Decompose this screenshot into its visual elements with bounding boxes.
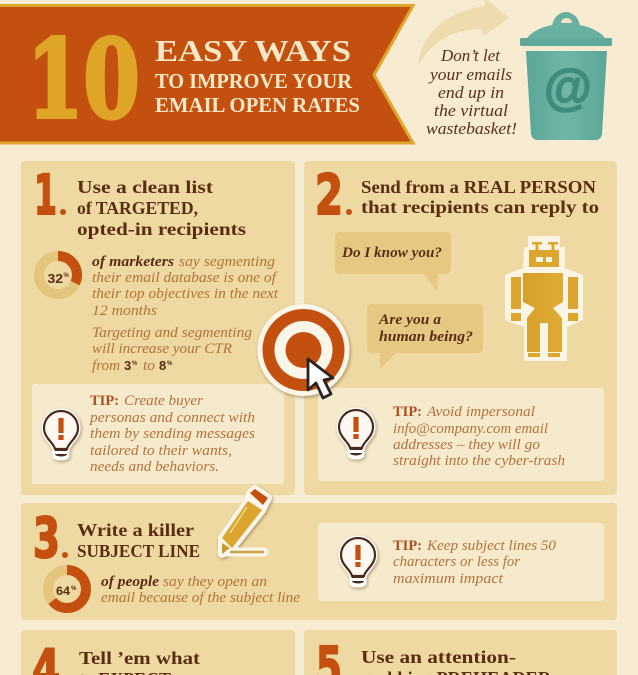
wastebasket caption: wastebasket! — [426, 119, 517, 138]
speech bubble: are you human — [367, 304, 483, 369]
tip text: straight into the cyber-trash — [393, 453, 565, 469]
speech bubble: do I know you: Do I know you? — [341, 245, 442, 261]
tip text: them by sending messages — [90, 426, 255, 442]
tip text: personas and connect with — [89, 410, 255, 426]
wastebasket caption: your emails — [428, 65, 512, 84]
title text: EASY WAYS — [155, 33, 351, 68]
heading 3 — [77, 520, 200, 561]
statistic text: % — [132, 361, 138, 367]
tip text: TIP: — [393, 538, 422, 554]
statistic text: 3 — [124, 358, 131, 373]
heading 5: Use an attention- — [361, 647, 516, 667]
heading 1: of TARGETED, — [77, 198, 198, 218]
title text: TO IMPROVE YOUR — [155, 69, 353, 93]
heading 2: that recipients can reply to — [361, 197, 599, 217]
heading 4 — [79, 648, 200, 675]
statistic text: their email database is one of — [92, 270, 278, 286]
heading 1 — [77, 177, 246, 239]
wastebasket caption — [426, 46, 517, 138]
donut chart: 64% — [48, 570, 86, 608]
tip text: TIP: — [90, 393, 119, 409]
icon: robot — [505, 236, 583, 361]
tip box 1 — [32, 384, 284, 484]
statistic text: will increase your CTR — [92, 341, 232, 357]
heading 4: Tell ’em what — [79, 648, 200, 668]
heading 3: Write a killer — [77, 520, 194, 540]
statistic text — [92, 254, 279, 374]
statistic text: from — [92, 358, 120, 374]
tip box 2 — [318, 388, 604, 481]
statistic text: 12 months — [92, 303, 157, 319]
tip text — [393, 538, 557, 587]
panel 3: subject line — [21, 489, 617, 620]
statistic text: of people — [101, 574, 159, 590]
panel 2: real person — [304, 161, 617, 495]
icon: cursor — [308, 359, 333, 398]
tip box 3 — [318, 523, 604, 601]
donut chart: 32%: % — [64, 273, 70, 279]
tip text: maximum impact — [393, 571, 504, 587]
icon: light bulb — [338, 409, 374, 458]
title banner — [0, 6, 413, 143]
wastebasket caption: Don’t let — [440, 46, 501, 65]
panel 1: clean list — [21, 161, 295, 495]
heading 3: SUBJECT LINE — [77, 541, 200, 561]
tip text: Create buyer — [124, 393, 203, 409]
donut chart: 32% — [39, 256, 77, 294]
tip text: needs and behaviors. — [90, 459, 219, 475]
tip text: Avoid impersonal — [426, 404, 535, 420]
tip text: info@company.com email — [393, 421, 548, 437]
icon: trash can — [520, 12, 612, 140]
number 3: 3 — [33, 506, 60, 570]
statistic text — [101, 574, 300, 606]
statistic text: their top objectives in the next — [92, 286, 279, 302]
heading 2 — [361, 177, 599, 217]
heading 1: opted-in recipients — [77, 219, 246, 239]
statistic text: % — [167, 361, 173, 367]
statistic text: 8 — [159, 358, 166, 373]
tip text: Keep subject lines 50 — [426, 538, 557, 554]
big number 10: 10 — [27, 15, 140, 143]
statistic text: to — [143, 358, 156, 374]
panel 4: tell them what to expect — [21, 630, 295, 675]
icon: pencil — [222, 489, 268, 554]
donut chart: 32%: 32 — [48, 272, 63, 286]
icon: trash can: @ — [544, 60, 592, 115]
tip text — [89, 393, 255, 475]
wastebasket caption: the virtual — [434, 101, 508, 120]
icon: target with cursor — [258, 304, 350, 398]
statistic text: email because of the subject line — [101, 590, 300, 606]
speech bubble: are you human: Are you a — [378, 312, 442, 328]
wastebasket caption: end up in — [438, 83, 504, 102]
title text: EMAIL OPEN RATES — [155, 93, 360, 117]
title text — [155, 33, 360, 117]
tip text: characters or less for — [393, 554, 520, 570]
number 1: 1 — [34, 163, 57, 227]
arrow to trash can — [418, 0, 509, 66]
heading 5 — [361, 647, 552, 675]
donut chart: 64%: 64 — [56, 584, 70, 598]
donut chart: 64%: % — [71, 586, 77, 592]
tip text: addresses – they will go — [393, 437, 541, 453]
statistic text: Targeting and segmenting — [92, 325, 253, 341]
icon: light bulb — [340, 537, 376, 586]
heading 2: Send from a REAL PERSON — [361, 177, 596, 197]
icon: light bulb — [43, 410, 79, 459]
speech bubble: do I know you — [335, 232, 451, 291]
speech bubble: are you human: human being? — [379, 329, 473, 345]
tip text: tailored to their wants, — [90, 443, 232, 459]
panel 5: preheader — [304, 630, 617, 675]
tip text: TIP: — [393, 404, 422, 420]
statistic text: say they open an — [163, 574, 267, 590]
number 2: 2 — [315, 163, 343, 227]
tip text — [393, 404, 565, 469]
statistic text: say segmenting — [179, 254, 276, 270]
statistic text: of marketers — [92, 254, 174, 270]
heading 1: Use a clean list — [77, 177, 213, 197]
